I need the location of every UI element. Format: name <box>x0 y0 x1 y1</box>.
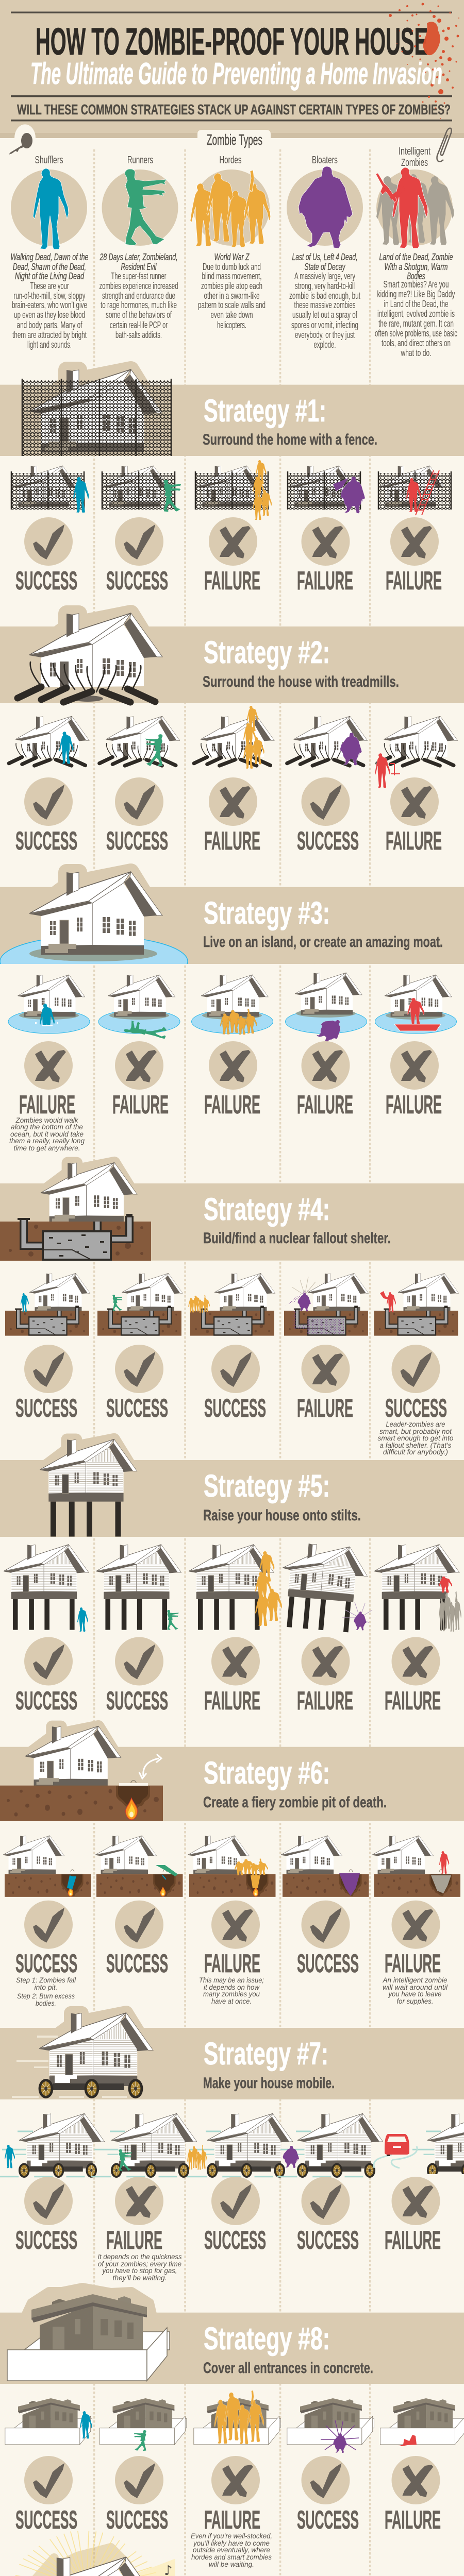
blood splatter <box>389 3 459 119</box>
column: bloaters: explode. <box>313 340 336 350</box>
strategy 2 banner: Strategy #2: <box>204 635 330 670</box>
strategy 3 note: along the bottom of the <box>11 1123 83 1131</box>
column: runners: Runners <box>127 155 153 166</box>
column: intelligent zombies: what to do. <box>401 348 431 358</box>
strategy 8 banner: Strategy #8: <box>204 2321 330 2356</box>
strategy 7 scene: hordes <box>187 2113 293 2178</box>
strategy 7 results: SUCCESS <box>297 2226 359 2255</box>
strategy 8 note: will be waiting. <box>209 2560 254 2568</box>
strategy 6 results: FAILURE <box>204 1949 260 1978</box>
strategy 6 results <box>15 1901 441 1978</box>
strategy 1 banner: Surround the home with a fence. <box>203 431 377 448</box>
strategy 6 notes: it depends on how <box>204 1983 260 1991</box>
header panel <box>0 0 464 138</box>
strategy 4 scene: hordes <box>188 1273 275 1336</box>
strategy 6 notes: Step 1: Zombies fall <box>16 1976 76 1984</box>
strategy 3 banner: Strategy #3: <box>204 895 330 930</box>
strategy 8 scene: intelligent <box>380 2398 464 2446</box>
strategy 7 note: of your zombies; every time <box>98 2260 181 2268</box>
strategy 7 banner: Strategy #7: <box>204 2036 328 2071</box>
strategy 4 note: difficult for anybody.) <box>383 1448 448 1456</box>
strategy 5 results: FAILURE <box>297 1686 353 1715</box>
strategy 6 notes: have at once. <box>211 1997 252 2005</box>
strategy 4 results: SUCCESS <box>106 1394 168 1422</box>
strategy 7 note <box>98 2252 181 2282</box>
column: hordes: Due to dumb luck and <box>203 262 261 272</box>
column: runners: zombies experience increased <box>99 281 178 291</box>
column: shufflers: up even as they lose blood <box>14 310 85 320</box>
column: bloaters: spores or vomit, infecting <box>291 320 358 330</box>
strategy 4 note: Leader-zombies are <box>386 1420 445 1428</box>
strategy 3 note: Zombies would walk <box>15 1116 78 1124</box>
strategy 8 results: SUCCESS <box>15 2505 77 2534</box>
strategy 2 scene: runners <box>100 716 180 766</box>
column: hordes <box>190 155 271 330</box>
column: intelligent zombies: Bodies <box>407 271 425 281</box>
strategy 3 scene: intelligent <box>375 975 457 1033</box>
column: bloaters: everybody, or they just <box>295 330 355 340</box>
column: runners: some of the behaviors of <box>106 310 172 320</box>
strategy 1 scene: shufflers <box>11 466 89 513</box>
column: runners: bath-salts addicts. <box>115 330 162 340</box>
strategy 1 results: FAILURE <box>297 566 353 595</box>
strategy 2 scene: intelligent <box>375 716 458 788</box>
icon: key <box>9 124 36 155</box>
strategy 8 note: outside eventually, where <box>193 2546 270 2554</box>
strategy 1 results: FAILURE <box>204 566 260 595</box>
strategy 3 note: time to get anywhere. <box>13 1144 80 1152</box>
strategy 4 note: smart enough to get into <box>377 1434 454 1442</box>
strategy 5 results: FAILURE <box>204 1686 260 1715</box>
strategy 8 results <box>15 2456 441 2534</box>
column: bloaters <box>287 155 363 350</box>
strategy 7 banner: Make your house mobile. <box>203 2075 335 2092</box>
strategy 6 notes <box>16 1976 448 2007</box>
column: bloaters: zombie is bad enough, but <box>289 291 360 301</box>
strategy 7 banner <box>0 2013 464 2099</box>
strategy 6 notes: An intelligent zombie <box>383 1976 448 1984</box>
strategy 2 scene: shufflers <box>9 716 89 766</box>
strategy 7 results: SUCCESS <box>15 2226 77 2255</box>
strategy 5 banner: Raise your house onto stilts. <box>203 1507 361 1524</box>
strategy 4 banner <box>0 1162 464 1261</box>
strategy 7 results: SUCCESS <box>204 2226 266 2255</box>
strategy 4 note: smart, but probably not <box>379 1427 452 1435</box>
strategy 2 scene: bloaters <box>287 716 368 766</box>
strategy 2 scene: hordes <box>194 706 274 769</box>
strategy 3 note <box>9 1116 85 1152</box>
strategy 1 results <box>15 517 442 595</box>
column: hordes: Hordes <box>220 155 241 166</box>
column: hordes: World War Z <box>214 252 250 262</box>
strategy 1 scene: hordes <box>195 460 272 520</box>
strategy 7 scene: intelligent with car <box>374 2113 464 2178</box>
strategy 1 banner <box>0 369 464 456</box>
strategy 5 results: SUCCESS <box>106 1686 168 1715</box>
strategy 8 note: hordes and smart zombies <box>191 2553 272 2561</box>
strategy 3 scene: shufflers <box>8 975 90 1038</box>
strategy 4 scene: bloaters <box>284 1273 369 1336</box>
strategy 6 scene: runners <box>95 1836 183 1897</box>
strategy 5 banner <box>0 1439 464 1537</box>
strategy 3 results <box>19 1041 442 1119</box>
strategy 8 scene: shufflers <box>5 2398 92 2445</box>
strategy 4 banner: Build/find a nuclear fallout shelter. <box>203 1230 391 1247</box>
column: bloaters: usually let out a spray of <box>292 310 358 320</box>
strategy 5 banner: Strategy #5: <box>204 1468 330 1503</box>
strategy 4 scene: shufflers <box>5 1273 90 1336</box>
strategy 6 scene: bloaters <box>281 1836 369 1897</box>
icon: double arrow <box>139 1754 161 1778</box>
column: bloaters: State of Decay <box>304 262 345 272</box>
column: shufflers: Shufflers <box>35 155 63 166</box>
strategy 1 results: SUCCESS <box>106 566 168 595</box>
column: hordes: blind mass movement, <box>202 271 262 281</box>
strategy 6 results: SUCCESS <box>106 1949 168 1978</box>
strategy 3 note: ocean, but it would take <box>10 1130 84 1138</box>
column: intelligent zombies: Intelligent <box>399 146 430 157</box>
strategy 1 scene: runners <box>102 466 181 512</box>
strategy 6 notes: you have to leave <box>388 1990 442 1998</box>
strategy 7 note: It depends on the quickness <box>98 2252 181 2261</box>
strategy 5 scene: shufflers <box>4 1545 89 1632</box>
strategy 6 results: SUCCESS <box>297 1949 359 1978</box>
strategy 4 results: SUCCESS <box>204 1394 266 1422</box>
column: runners: Resident Evil <box>121 262 157 272</box>
strategy 6 banner <box>0 1726 464 1821</box>
column: shufflers: These are your <box>30 281 69 291</box>
strategy 1 scene: intelligent <box>378 466 452 515</box>
strategy 4 banner: Strategy #4: <box>204 1192 330 1227</box>
strategy 1 scene: bloaters <box>287 466 365 514</box>
column: shufflers: and body parts. Many of <box>16 320 82 330</box>
strategy 3 note: them a really, really long <box>9 1137 85 1145</box>
strategy 6 notes: Step 2: Burn excess <box>17 1992 75 2000</box>
strategy 3 banner <box>0 863 464 964</box>
column: shufflers: Walking Dead, Dawn of the <box>10 252 89 262</box>
strategy 5 results: SUCCESS <box>15 1686 77 1715</box>
strategy 6 notes: for supplies. <box>397 1997 433 2005</box>
column: shufflers: them are attracted by bright <box>12 330 87 340</box>
column: shufflers: run-of-the-mill, slow, sloppy <box>13 291 86 301</box>
icon: paperclip <box>437 128 452 162</box>
strategy 2 results: SUCCESS <box>15 826 77 855</box>
strategy 8 scene: runners <box>100 2398 187 2451</box>
column: runners: 28 Days Later, Zombieland, <box>100 252 177 262</box>
column: shufflers: Night of the Living Dead <box>15 271 85 281</box>
column: shufflers: Dead, Shawn of the Dead, <box>13 262 86 272</box>
strategy 2 banner: Surround the house with treadmills. <box>203 673 399 690</box>
zombie types tab: Zombie Types <box>207 132 262 148</box>
strategy 4 results: SUCCESS <box>15 1394 77 1422</box>
column: bloaters: A massively large, very <box>294 271 355 281</box>
strategy 4 scene: intelligent <box>374 1273 459 1336</box>
strategy 5 scene: hordes <box>189 1545 282 1630</box>
strategy 6 notes: will wait around until <box>383 1983 448 1991</box>
strategy 3 results: FAILURE <box>112 1090 169 1119</box>
strategy 8 results: SUCCESS <box>297 2505 359 2534</box>
column: intelligent zombies: Zombies <box>401 157 428 168</box>
column: shufflers <box>10 155 89 350</box>
strategy 8 note <box>191 2532 272 2568</box>
column: bloaters: Last of Us, Left 4 Dead, <box>292 252 358 262</box>
strategy 6 banner: Strategy #6: <box>204 1755 330 1790</box>
strategy 7 results <box>15 2177 441 2255</box>
column: shufflers: light and sounds. <box>27 340 72 350</box>
strategy 3 scene: bloaters <box>286 973 367 1047</box>
column: runners: strength and endurance due <box>102 291 175 301</box>
strategy 2 results: SUCCESS <box>297 826 359 855</box>
strategy 3 scene: runners <box>98 975 180 1039</box>
strategy 8 banner: Cover all entrances in concrete. <box>203 2360 373 2377</box>
strategy 8 results: SUCCESS <box>106 2505 168 2534</box>
strategy 3 results: FAILURE <box>19 1090 75 1119</box>
strategy 5 scene: bloaters <box>280 1541 372 1632</box>
column: runners <box>99 155 178 340</box>
zombie types tab <box>197 130 271 148</box>
strategy 9 banner <box>0 2531 464 2576</box>
strategy 7 scene: runners <box>91 2113 197 2178</box>
column: bloaters: these massive zombies <box>294 300 356 310</box>
strategy 7 note: they’ll be waiting. <box>112 2274 167 2282</box>
column: runners: to rage hormones, much like <box>101 300 177 310</box>
strategy 4 results: FAILURE <box>297 1394 353 1422</box>
strategy 6 scene: shufflers <box>3 1836 91 1897</box>
column: hordes: pattern to scale walls and <box>198 300 266 310</box>
strategy 6 scene: intelligent <box>372 1836 460 1897</box>
strategy 2 results <box>15 777 442 855</box>
strategy 6 notes: bodies. <box>36 1999 56 2007</box>
strategy 4 results <box>15 1345 447 1422</box>
strategy 8 scene: hordes <box>194 2390 280 2445</box>
strategy 6 notes: into pit. <box>34 1983 58 1991</box>
strategy 4 note <box>377 1420 454 1456</box>
strategy 3 results: FAILURE <box>297 1090 353 1119</box>
column: hordes: even take down <box>210 310 253 320</box>
column: bloaters: strong, very hard-to-kill <box>295 281 355 291</box>
strategy 5 scene: runners <box>96 1545 181 1630</box>
strategy 2 banner <box>0 613 464 703</box>
strategy 6 results: SUCCESS <box>15 1949 77 1978</box>
strategy 8 note: you’ll likely have to come <box>193 2539 270 2547</box>
strategy 7 scene: bloaters <box>277 2113 383 2178</box>
strategy 3 scene: hordes <box>192 975 273 1035</box>
strategy 2 results: SUCCESS <box>106 826 168 855</box>
strategy 1 results: SUCCESS <box>15 566 77 595</box>
strategy 2 results: FAILURE <box>204 826 260 855</box>
column: hordes: helicopters. <box>217 320 246 330</box>
strategy 8 note: Even if you’re well-stocked, <box>191 2532 272 2540</box>
strategy 7 note: you have to stop for gas, <box>102 2266 177 2275</box>
strategy 7 scene: shufflers <box>0 2113 105 2178</box>
column: intelligent zombies <box>375 146 457 358</box>
column: shufflers: brain-eaters, who won’t give <box>12 300 87 310</box>
column: bloaters: Bloaters <box>312 155 338 166</box>
strategy 6 banner: Create a fiery zombie pit of death. <box>203 1794 387 1811</box>
column: runners: The super-fast runner <box>111 271 166 281</box>
strategy 8 scene: bloaters <box>287 2398 374 2453</box>
strategy 6 scene: hordes <box>188 1836 275 1897</box>
strategy 5 results <box>15 1637 441 1715</box>
strategy 4 scene: runners <box>97 1273 183 1336</box>
strategy 6 notes: many zombies you <box>203 1990 260 1998</box>
strategy 8 banner <box>0 2287 464 2384</box>
strategy 1 banner: Strategy #1: <box>204 393 326 428</box>
strategy 6 notes: This may be an issue; <box>199 1976 264 1984</box>
strategy 4 note: a fallout shelter. (That’s <box>379 1441 452 1449</box>
strategy 3 results: FAILURE <box>204 1090 260 1119</box>
column: hordes: zombies pile atop each <box>201 281 262 291</box>
strategy 5 scene: intelligent <box>374 1545 461 1632</box>
strategy 8 results: FAILURE <box>204 2505 260 2534</box>
column: runners: certain real-life PCP or <box>110 320 168 330</box>
column: hordes: other in a swarm-like <box>204 291 260 301</box>
strategy 7 results: FAILURE <box>106 2226 162 2255</box>
